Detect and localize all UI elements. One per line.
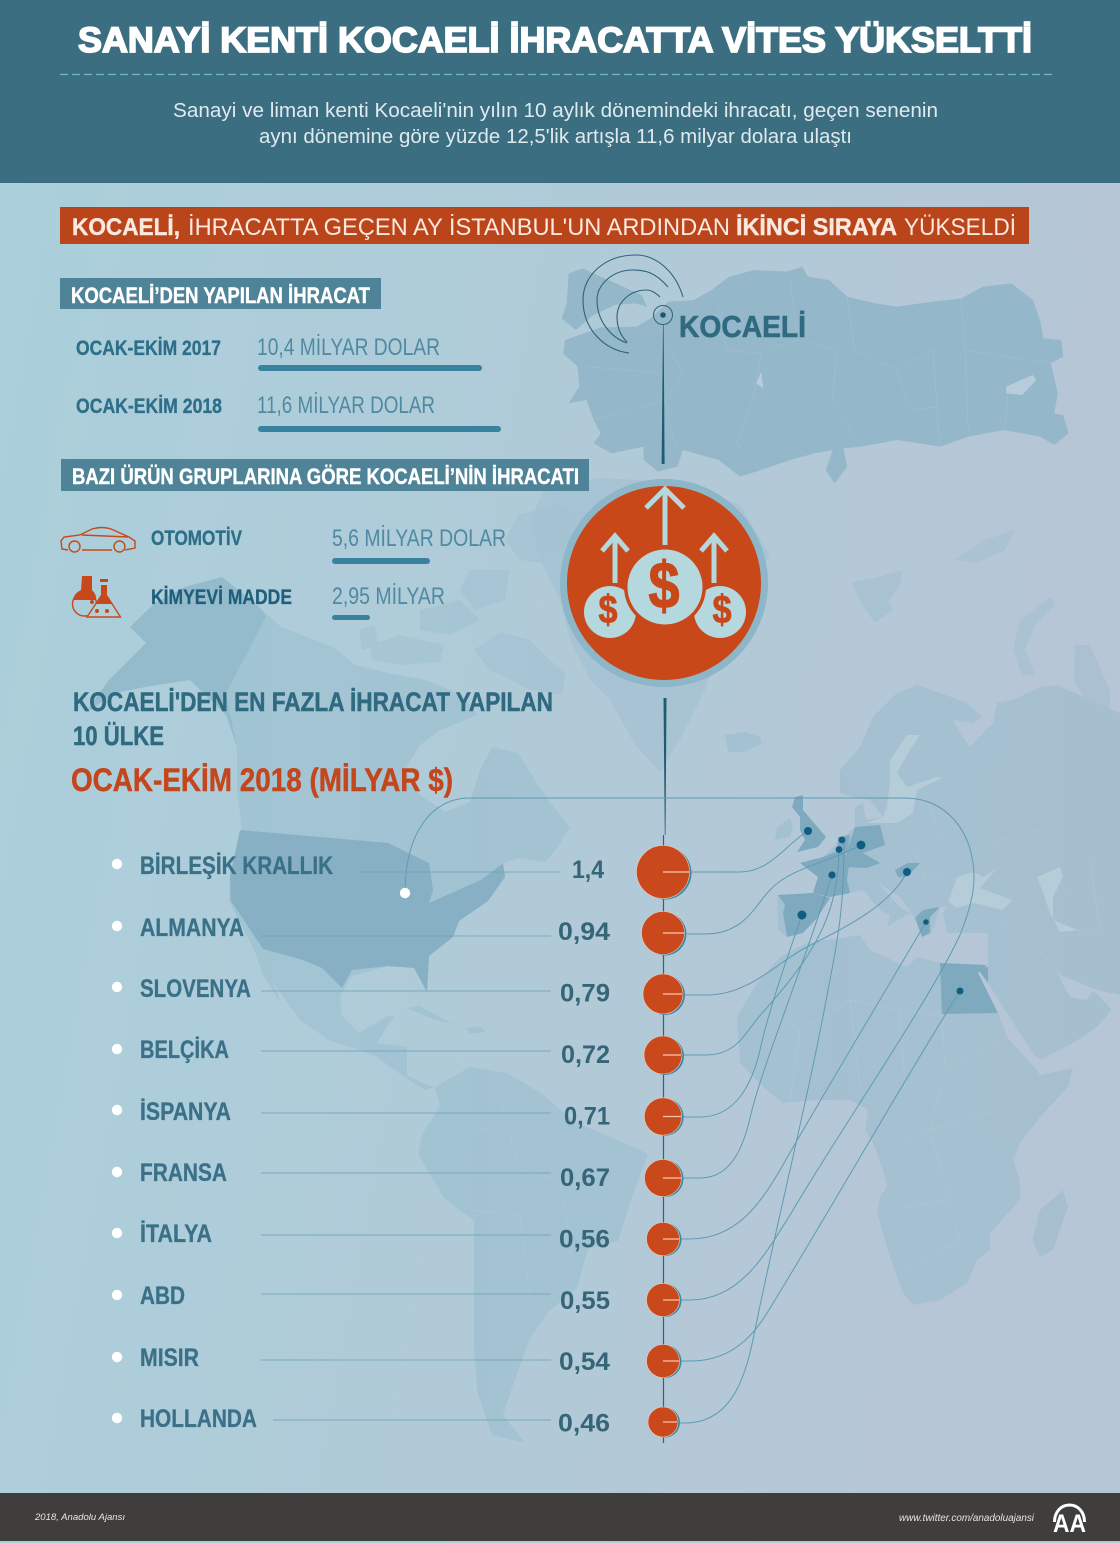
country: hungary bbox=[895, 863, 920, 877]
country list rows bbox=[112, 846, 692, 1438]
connector: egypt bbox=[680, 991, 960, 1361]
map: inland seas bbox=[866, 735, 1077, 932]
map markers bbox=[798, 827, 964, 994]
axis line bbox=[662, 835, 664, 1443]
heading line 2: 10 ÜLKE bbox=[73, 721, 164, 751]
row: birleşik krallık: BİRLEŞİK KRALLIK bbox=[140, 852, 333, 880]
row: hollanda bbox=[112, 1405, 680, 1438]
map: greenland bbox=[530, 478, 770, 772]
heading: top ten countries bbox=[73, 687, 553, 751]
intro line 1: Sanayi ve liman kenti Kocaeli'nin yılın 10 aylık dönemindeki ihracatı, geçen senenin bbox=[173, 100, 938, 122]
connector: coin circle to country list bbox=[664, 698, 666, 835]
map: highlighted european and north african countries bbox=[778, 795, 998, 1014]
row: otomotiv: OTOMOTİV bbox=[151, 527, 242, 550]
connector: united kingdom bbox=[690, 831, 808, 872]
sea: baltic bbox=[866, 735, 942, 823]
sea: caspian bbox=[1037, 867, 1077, 932]
row: fransa bbox=[112, 1159, 684, 1197]
map: north america bbox=[85, 577, 570, 1090]
section heading: export totals bbox=[60, 278, 381, 309]
orange banner: İHRACATTA GEÇEN AY İSTANBUL'UN ARDINDAN bbox=[188, 214, 730, 241]
country: germany bbox=[847, 825, 885, 868]
coin: left: $ bbox=[598, 588, 618, 632]
connector: belgium bbox=[683, 849, 839, 1055]
row: slovenya: 0,79 bbox=[560, 980, 610, 1008]
row: mısır bbox=[112, 1344, 682, 1378]
section heading: product groups bbox=[61, 459, 589, 491]
coin: centre: $ bbox=[648, 548, 680, 622]
subheading: period: OCAK-EKİM 2018 (MİLYAR $) bbox=[71, 762, 453, 798]
coin: centre bbox=[624, 546, 706, 628]
orange banner: KOCAELİ, bbox=[72, 214, 180, 241]
row: almanya: 0,94 bbox=[558, 918, 610, 946]
row: ocak-ekim 2018 bbox=[76, 392, 501, 432]
country: egypt bbox=[940, 963, 998, 1014]
sea: black sea bbox=[948, 868, 1012, 910]
row: otomotiv bbox=[151, 525, 506, 564]
row: italya: 0,56 bbox=[559, 1226, 610, 1254]
orange banner bbox=[60, 207, 1029, 244]
row: ocak-ekim 2017 bbox=[76, 334, 482, 371]
row: abd bbox=[112, 1282, 682, 1317]
arrow: centre bbox=[646, 489, 684, 545]
row: mısır: 0,54 bbox=[559, 1348, 610, 1376]
row: ocak-ekim 2017: OCAK-EKİM 2017 bbox=[76, 337, 221, 360]
row: almanya bbox=[112, 912, 687, 956]
coin: left bbox=[584, 586, 636, 638]
connector: spain bbox=[683, 915, 802, 1117]
row: mısır: MISIR bbox=[140, 1344, 199, 1372]
orange banner: İKİNCİ SIRAYA bbox=[736, 214, 897, 241]
row: hollanda: 0,46 bbox=[558, 1410, 610, 1438]
row: belçika: 0,72 bbox=[561, 1041, 610, 1069]
row: almanya: ALMANYA bbox=[140, 914, 244, 942]
row: abd: ABD bbox=[140, 1282, 185, 1310]
footer: twitter address: www.twitter.com/anadoluajansi bbox=[899, 1512, 1035, 1524]
row: hollanda: HOLLANDA bbox=[140, 1405, 257, 1433]
row: kimyevi madde: 2,95 MİLYAR bbox=[332, 583, 445, 610]
country: greece bbox=[915, 907, 940, 937]
connector: netherlands bbox=[680, 840, 844, 1423]
arrow: left bbox=[602, 536, 628, 583]
title: SANAYİ KENTİ KOCAELİ İHRACATTA VİTES YÜKSELTTİ bbox=[78, 21, 1032, 60]
map: canadian arctic islands bbox=[359, 503, 577, 695]
map: africa bbox=[737, 935, 1073, 1305]
turkey: lakes bbox=[756, 372, 1036, 395]
connector: italy bbox=[680, 922, 926, 1239]
row: ispanya: 0,71 bbox=[564, 1102, 610, 1130]
map: alaska highlighted bbox=[85, 577, 266, 747]
map: arctic islands of eurasia bbox=[852, 530, 1110, 712]
intro text bbox=[173, 100, 938, 148]
map: south america bbox=[418, 1067, 648, 1443]
row: otomotiv: 5,6 MİLYAR DOLAR bbox=[332, 525, 506, 552]
map: caribbean islands bbox=[407, 1006, 486, 1034]
label: kocaeli: KOCAELİ bbox=[679, 309, 806, 344]
row: abd: 0,55 bbox=[560, 1287, 610, 1315]
connector: turkey to coin circle bbox=[662, 325, 665, 464]
row: ocak-ekim 2017: 10,4 MİLYAR DOLAR bbox=[257, 334, 440, 361]
icon: coins with rising arrows bbox=[560, 479, 768, 687]
section heading: export totals: KOCAELİ’DEN YAPILAN İHRACAT bbox=[71, 283, 370, 308]
row: kimyevi madde: KİMYEVİ MADDE bbox=[151, 586, 292, 609]
row: ocak-ekim 2018: 11,6 MİLYAR DOLAR bbox=[257, 392, 435, 419]
icon: car bbox=[61, 528, 135, 552]
section heading: product groups: BAZI ÜRÜN GRUPLARINA GÖRE KOCAELİ’NİN İHRACATI bbox=[72, 464, 579, 489]
arrow: right bbox=[701, 536, 727, 583]
country: benelux bbox=[837, 835, 850, 853]
row: slovenya bbox=[112, 974, 685, 1015]
connector: france bbox=[683, 875, 832, 1178]
map: eurasia bbox=[777, 685, 1120, 1060]
map: iceland bbox=[725, 732, 762, 752]
row: italya bbox=[112, 1220, 682, 1256]
map: ireland bbox=[775, 818, 793, 840]
country connector lines bbox=[405, 798, 974, 1423]
connector: germany bbox=[687, 845, 861, 934]
marker: usa bbox=[400, 888, 410, 898]
row: belçika bbox=[112, 1036, 684, 1075]
connector: usa bbox=[405, 798, 974, 1300]
icon: kocaeli location signal bbox=[583, 255, 683, 353]
icon: chemistry flasks bbox=[72, 576, 120, 617]
coin: right bbox=[694, 586, 746, 638]
map: country borders bbox=[450, 790, 1100, 1300]
orange banner: YÜKSELDİ bbox=[904, 214, 1016, 241]
map: usa highlighted bbox=[230, 830, 505, 992]
row: belçika: BELÇİKA bbox=[140, 1036, 229, 1064]
row: fransa: 0,67 bbox=[560, 1164, 610, 1192]
turkey: province borders bbox=[586, 277, 1054, 470]
row: kimyevi madde bbox=[151, 583, 445, 620]
country: spain bbox=[778, 893, 830, 937]
world map bbox=[85, 478, 1120, 1443]
country: united kingdom bbox=[792, 795, 826, 852]
coin: right: $ bbox=[712, 588, 732, 632]
row: birleşik krallık: 1,4 bbox=[572, 856, 604, 884]
country: france bbox=[800, 850, 850, 897]
connector: slovenia bbox=[683, 872, 907, 995]
row: ispanya bbox=[112, 1098, 684, 1136]
row: fransa: FRANSA bbox=[140, 1159, 227, 1187]
footer: credit: 2018, Anadolu Ajansı bbox=[34, 1512, 125, 1523]
map: turkey bbox=[561, 267, 1069, 483]
icon: anadolu agency logo: AA bbox=[1053, 1510, 1086, 1538]
row: ocak-ekim 2018: OCAK-EKİM 2018 bbox=[76, 395, 222, 418]
heading line 1: KOCAELİ'DEN EN FAZLA İHRACAT YAPILAN bbox=[73, 687, 553, 717]
turkey: thrace and north-west bbox=[561, 268, 647, 330]
footer bbox=[0, 1493, 1120, 1541]
row: ispanya: İSPANYA bbox=[140, 1098, 231, 1126]
row: slovenya: SLOVENYA bbox=[140, 975, 251, 1003]
header band bbox=[0, 0, 1120, 183]
intro line 2: aynı dönemine göre yüzde 12,5'lik artışla 11,6 milyar dolara ulaştı bbox=[259, 126, 852, 148]
turkey: anatolia bbox=[563, 267, 1069, 483]
row: italya: İTALYA bbox=[140, 1220, 212, 1248]
row: birleşik krallık bbox=[112, 846, 692, 900]
map: madagascar bbox=[1032, 1190, 1068, 1257]
